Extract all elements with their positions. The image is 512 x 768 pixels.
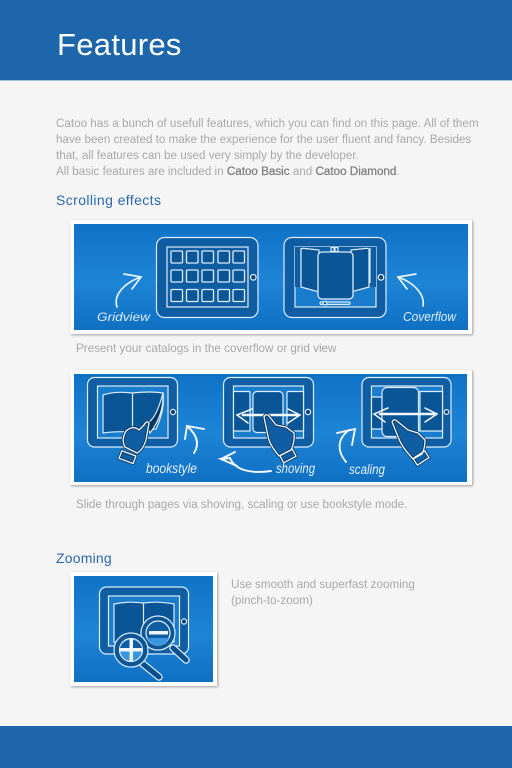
label: coverflow: Coverflow bbox=[403, 309, 457, 324]
arrow: coverflow bbox=[398, 274, 423, 306]
caption: coverflow: Present your catalogs in the coverflow or grid view bbox=[76, 342, 336, 355]
icon: zoom out magnifier bbox=[141, 616, 186, 660]
icon: coverflow tablet bbox=[284, 238, 386, 318]
heading: scrolling effects: Scrolling effects bbox=[56, 192, 161, 208]
icon: hand scaling bbox=[392, 420, 429, 465]
arrow: gridview bbox=[116, 274, 141, 307]
panel: bookstyle, shoving, scaling bbox=[70, 370, 472, 485]
panel: gridview and coverflow bbox=[70, 220, 472, 334]
intro text: Catoo has a bunch of usefull features, which you can find on this page. All of them bbox=[56, 117, 479, 130]
arrow: shoving bbox=[221, 452, 271, 472]
header band bbox=[0, 0, 512, 81]
zooming description: (pinch-to-zoom) bbox=[231, 594, 313, 607]
icon: hand page turn bbox=[119, 422, 149, 463]
icon: hand shoving bbox=[264, 415, 296, 463]
zooming description: Use smooth and superfast zooming bbox=[231, 578, 415, 591]
arrow: bookstyle bbox=[185, 426, 204, 453]
caption: sliding: Slide through pages via shoving, scaling or use bookstyle mode. bbox=[76, 498, 407, 511]
icon: book tablet bbox=[100, 587, 188, 654]
arrow: scaling bbox=[337, 429, 355, 462]
icon: bookstyle tablet bbox=[88, 378, 178, 447]
icon: zoom in magnifier bbox=[114, 633, 159, 677]
arrow: scaling double bbox=[374, 408, 437, 422]
label: shoving: shoving bbox=[276, 461, 315, 476]
footer band bbox=[0, 726, 512, 768]
arrow: shoving double bbox=[237, 409, 300, 423]
label: gridview: Gridview bbox=[97, 310, 152, 324]
icon: shoving tablet bbox=[224, 378, 314, 447]
heading: zooming: Zooming bbox=[56, 550, 112, 566]
intro text: have been created to make the experience for the user fluent and fancy. Besides bbox=[56, 133, 471, 146]
intro text bbox=[56, 117, 479, 178]
intro text: that, all features can be used very simply by the developer. bbox=[56, 149, 359, 162]
label: scaling: scaling bbox=[349, 462, 385, 477]
panel: zooming illustration bbox=[70, 572, 217, 686]
title: Features bbox=[57, 27, 182, 62]
zooming description bbox=[231, 578, 415, 607]
icon: scaling tablet bbox=[362, 378, 451, 447]
label: bookstyle: bookstyle bbox=[146, 461, 197, 476]
intro text: All basic features are included in Catoo Basic and Catoo Diamond. bbox=[56, 165, 400, 178]
icon: grid tablet bbox=[156, 238, 258, 318]
